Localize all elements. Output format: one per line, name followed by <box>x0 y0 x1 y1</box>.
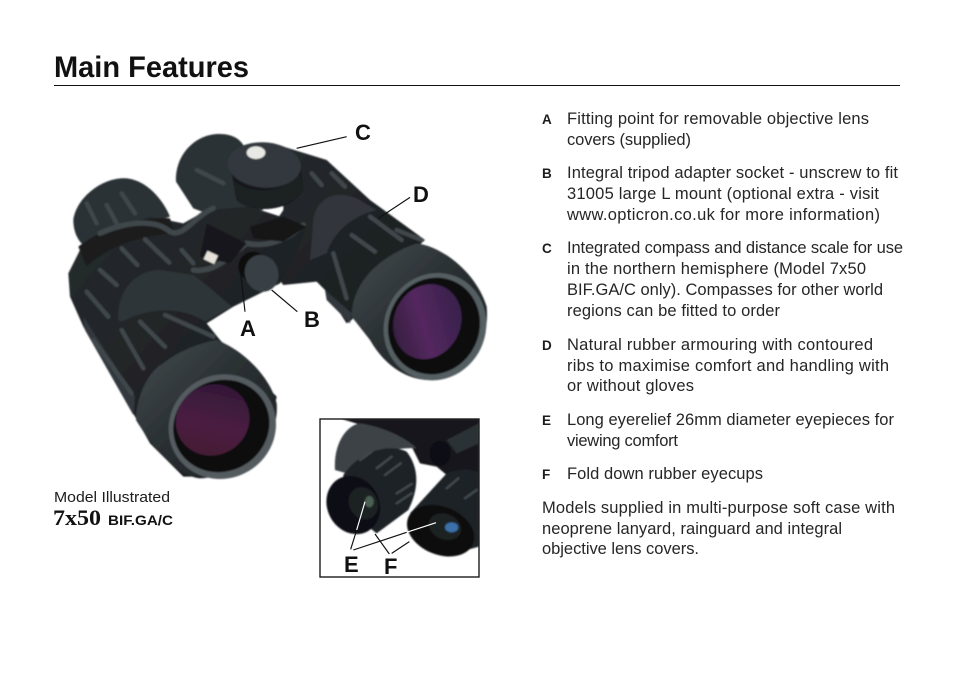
right eyepiece body <box>410 470 479 550</box>
model caption: 7x50 <box>53 505 101 530</box>
feature B: www.opticron.co.uk for more information) <box>566 206 880 224</box>
feature E: Long eyerelief 26mm diameter eyepieces for <box>567 411 894 429</box>
feature D: D <box>542 338 552 353</box>
feature E: viewing comfort <box>567 432 678 450</box>
label D: D <box>413 182 429 207</box>
model caption <box>53 490 173 530</box>
feature B: 31005 large L mount (optional extra - visit <box>567 185 879 203</box>
feature C: Integrated compass and distance scale for use <box>567 239 903 257</box>
right barrel shoulder <box>310 195 377 260</box>
left barrel <box>68 207 307 477</box>
focus knob <box>238 252 268 282</box>
feature F: Fold down rubber eyecups <box>567 465 763 483</box>
feature A: covers (supplied) <box>567 131 691 149</box>
left hood <box>136 340 277 478</box>
label C: C <box>355 120 371 145</box>
left eyepiece body <box>343 448 416 533</box>
feature A: Fitting point for removable objective lens <box>567 110 869 128</box>
model caption: BIF.GA/C <box>108 513 173 528</box>
feature A <box>542 110 869 149</box>
leader lines <box>241 137 410 312</box>
inset leader lines <box>351 502 436 554</box>
ribs <box>87 170 422 393</box>
right barrel <box>257 147 425 323</box>
compass <box>232 165 303 209</box>
feature E: E <box>542 413 551 428</box>
feature F: F <box>542 467 550 482</box>
left shoulder <box>118 270 232 322</box>
right eyecup <box>406 504 474 558</box>
closing note: neoprene lanyard, rainguard and integral <box>542 520 842 538</box>
rear body <box>342 419 479 475</box>
left band <box>78 218 175 267</box>
strap <box>100 208 303 270</box>
feature D <box>542 336 889 395</box>
feature D: ribs to maximise comfort and handling with <box>567 357 889 375</box>
title: Main Features <box>54 51 249 84</box>
inset frame <box>320 419 479 577</box>
label A: A <box>240 316 256 341</box>
label F: F <box>384 554 397 579</box>
label E: E <box>344 552 359 577</box>
inset photograph of eyepieces <box>316 419 482 577</box>
closing note <box>542 499 895 558</box>
left lens <box>149 355 295 499</box>
left eyecup <box>325 476 380 536</box>
closing note: objective lens covers. <box>542 540 699 558</box>
feature C <box>542 239 903 320</box>
feature C: BIF.GA/C only). Compasses for other world <box>567 281 883 299</box>
bridge detail <box>200 223 247 263</box>
feature D: Natural rubber armouring with contoured <box>567 336 873 354</box>
feature C: in the northern hemisphere (Model 7x50 <box>567 260 866 278</box>
feature C: regions can be fitted to order <box>567 302 780 320</box>
feature B <box>542 164 898 224</box>
side panel <box>83 317 135 415</box>
left eyepiece <box>73 178 170 247</box>
right hood <box>352 243 487 380</box>
feature B: B <box>542 166 552 181</box>
feature C: C <box>542 241 552 256</box>
back right eyepiece <box>176 134 263 213</box>
feature E <box>542 411 894 450</box>
right lens <box>366 256 504 397</box>
feature D: or without gloves <box>567 377 694 395</box>
model caption: Model Illustrated <box>54 490 170 506</box>
closing note: Models supplied in multi-purpose soft case with <box>542 499 895 517</box>
main binoculars photograph <box>68 134 504 499</box>
label B: B <box>304 307 320 332</box>
feature B: Integral tripod adapter socket - unscrew to fit <box>567 164 898 182</box>
feature A: A <box>542 112 552 127</box>
